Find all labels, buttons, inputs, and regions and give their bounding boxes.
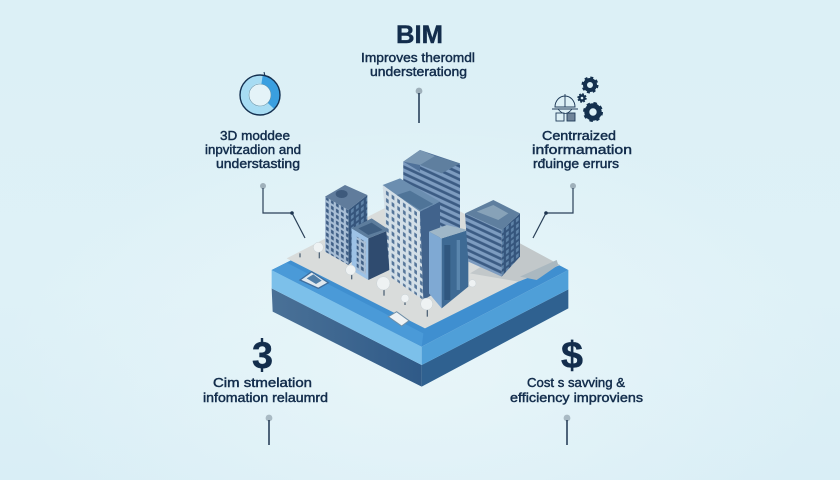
icon: donut chart: [240, 72, 280, 115]
city block platform with buildings: [272, 150, 568, 387]
text: centralized information: [532, 128, 632, 171]
icon: dollar sign: $: [561, 335, 583, 377]
top description: Improves theromdl: [361, 50, 475, 65]
text: 3D model: understasting: [216, 156, 300, 171]
building: right tower: [465, 200, 520, 277]
text: simulation information: Cim stmelation: [213, 375, 312, 390]
connector: right: [533, 183, 576, 238]
top description: [361, 50, 475, 79]
text: 3D model: inpvitzadion and: [205, 142, 301, 157]
connector: bottom left: [266, 415, 272, 445]
platform base: [272, 193, 568, 387]
text: simulation information: infomation relaumrd: [203, 390, 328, 405]
building: left tower: [325, 185, 367, 265]
building: small block: [352, 218, 389, 280]
vehicles: [300, 260, 558, 326]
icon: engineer and gears: [552, 78, 602, 121]
top description: understerationg: [370, 64, 467, 79]
building: front tower: [429, 225, 468, 308]
text: cost saving: [510, 375, 644, 405]
ground plaza: [287, 190, 560, 328]
text: centralized information: Centrraized: [542, 128, 616, 143]
text: centralized information: rđuinge errurs: [533, 156, 620, 171]
connector: bottom right: [564, 415, 570, 445]
text: 3D model: 3D moddee: [220, 128, 290, 143]
heading: BIM: [361, 21, 475, 79]
building: back tower: [403, 150, 460, 230]
text: cost saving: Cost s savving &: [527, 375, 625, 390]
icon: dollar three: 3: [252, 335, 273, 376]
text: 3D model: [205, 128, 301, 171]
trees: [300, 242, 476, 317]
building: central tower: [383, 178, 440, 300]
connector: left: [260, 183, 305, 238]
text: centralized information: informamation: [532, 142, 632, 157]
connector: top: [416, 88, 422, 123]
text: simulation information: [203, 375, 328, 405]
text: cost saving: efficiency improviens: [510, 390, 644, 405]
heading: BIM: BIM: [396, 21, 443, 49]
